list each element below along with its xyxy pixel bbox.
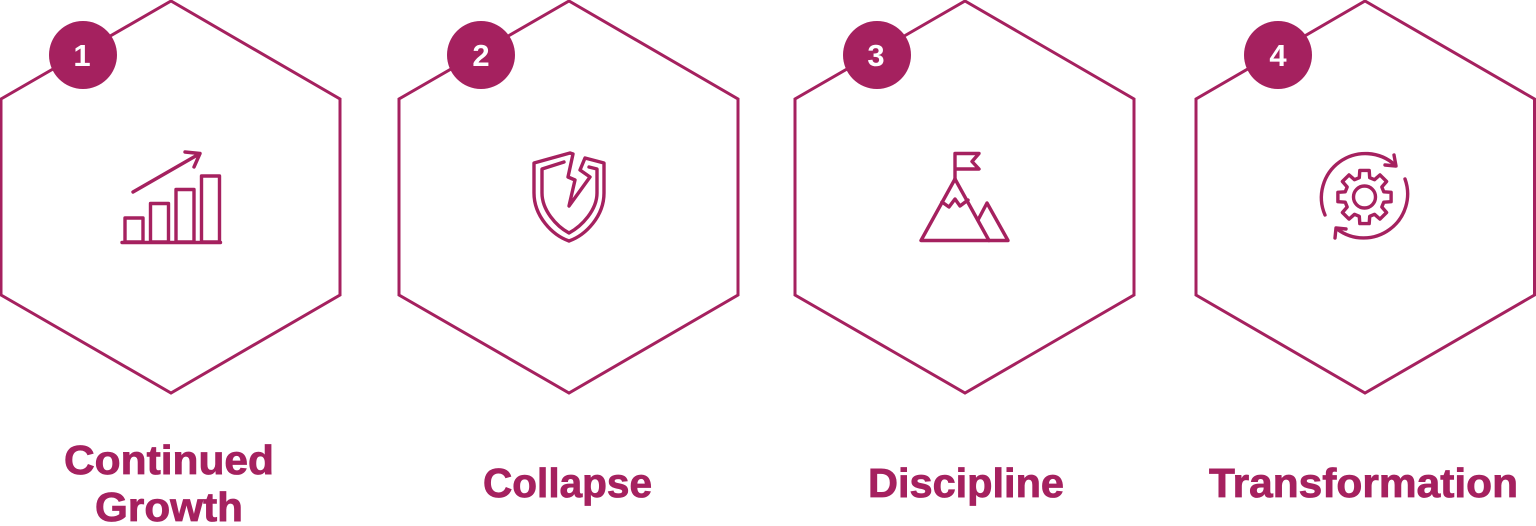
panel: continued growth (1, 1, 340, 526)
number badge 1: 1 (73, 38, 91, 73)
label: Collapse: Collapse (483, 460, 652, 506)
icon: mountain with flag (921, 154, 1008, 240)
icon: cracked shield (534, 153, 604, 241)
hexagon outline 3 (795, 1, 1134, 393)
label: Transformation: Transformation (1209, 460, 1518, 506)
label: Continued Growth (64, 437, 274, 526)
number badge 1 (49, 21, 117, 89)
panel: transformation (1196, 1, 1534, 506)
icon: rising bar chart with arrow (122, 152, 220, 242)
panel: discipline (795, 1, 1134, 506)
icon: gear with circular arrows (1321, 154, 1408, 238)
number badge 2 (447, 21, 515, 89)
hexagon outline 2 (399, 1, 738, 393)
number badge 3: 3 (867, 38, 885, 73)
number badge 4 (1244, 21, 1312, 89)
hexagon outline 1 (1, 1, 340, 393)
label: Discipline: Discipline (868, 460, 1064, 506)
number badge 2: 2 (472, 38, 490, 73)
panel: collapse (399, 1, 738, 506)
number badge 4: 4 (1269, 38, 1287, 73)
hexagon outline 4 (1196, 1, 1534, 393)
number badge 3 (843, 21, 911, 89)
label: Continued Growth: Continued (64, 437, 274, 483)
